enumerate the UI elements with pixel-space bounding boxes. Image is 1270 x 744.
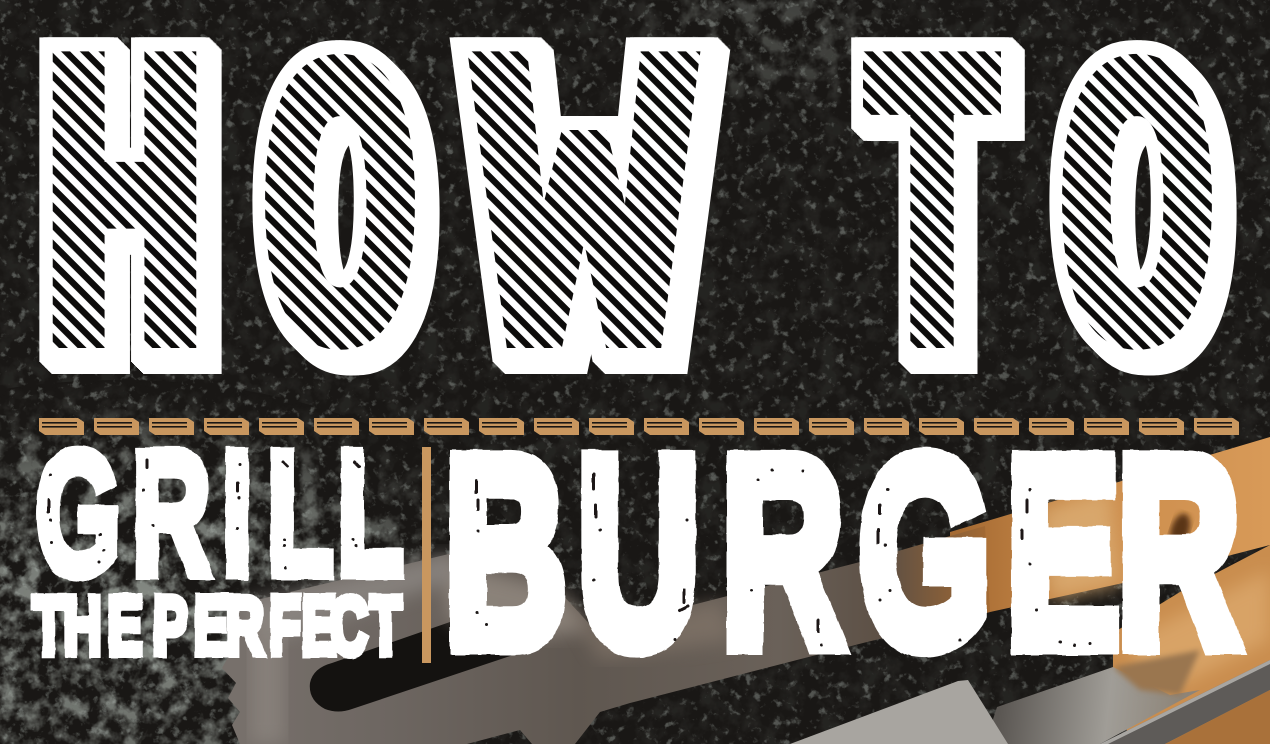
photo: stone grill block and steel blade	[790, 650, 1270, 744]
heading: BURGER: BURGER	[444, 401, 1240, 702]
diagonal stripes inside letters	[52, 51, 1212, 350]
heading: THE PERFECT: THE PERFECT	[32, 579, 401, 672]
heading: GRILL: GRILL	[36, 415, 404, 612]
white letter bodies: O	[1058, 0, 1216, 463]
white letter bodies	[39, 0, 1216, 468]
vertical tan divider	[422, 447, 431, 663]
divider: row of tan dashes	[39, 418, 1240, 435]
photo: wooden spatula handle	[950, 437, 1270, 744]
photo: metal spatula	[222, 526, 990, 744]
white letter bodies: O	[261, 0, 419, 463]
distressed headings block	[32, 401, 1240, 702]
title: HOW TO with striped slab letters	[0, 0, 1270, 468]
white letter bodies: T	[860, 0, 1004, 468]
distressed ink specks on lettering	[48, 460, 1090, 645]
